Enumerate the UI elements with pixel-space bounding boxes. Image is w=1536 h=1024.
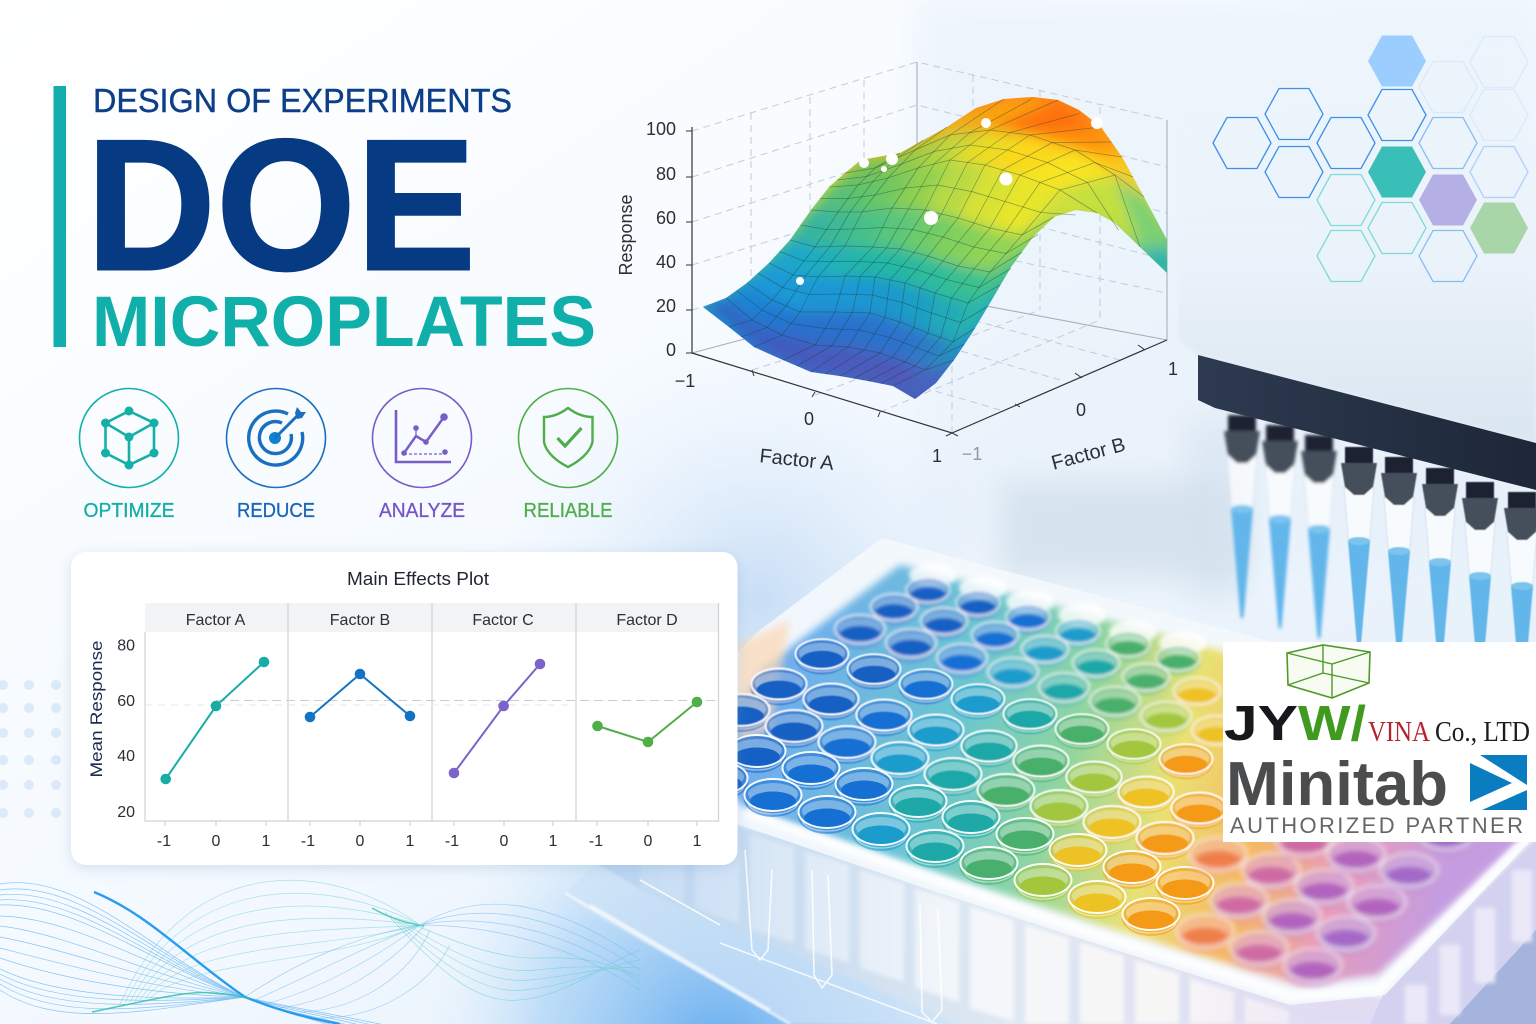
x axis labels: 1 — [262, 833, 271, 850]
factor B axis labels — [962, 359, 1178, 464]
y axis labels: 80 — [117, 638, 135, 654]
plate corner feet — [640, 850, 942, 1024]
panel card — [71, 552, 738, 865]
authorized partner: AUTHORIZED PARTNER — [1230, 813, 1523, 838]
logo panel — [1223, 642, 1536, 842]
factor B axis labels: 0 — [1076, 400, 1086, 420]
microplate — [562, 538, 1536, 1024]
plate side face right — [1370, 835, 1536, 1024]
response axis labels — [646, 119, 676, 360]
response axis labels: 80 — [656, 164, 676, 184]
wells front rows — [690, 735, 1214, 936]
plate tubes — [640, 797, 1289, 1024]
factor A title: Factor A — [758, 445, 835, 475]
hexagon: teal — [1368, 146, 1426, 198]
y axis labels — [117, 638, 135, 821]
factor A axis labels: 1 — [932, 446, 942, 466]
response axis labels: 40 — [656, 252, 676, 272]
icon: JYW cube logo — [1287, 645, 1370, 698]
chart box lines — [686, 62, 1167, 436]
factor A axis labels: 0 — [804, 409, 814, 429]
series: factor C — [449, 659, 545, 778]
wells blurred front right — [1176, 819, 1473, 987]
x axis labels: -1 — [301, 833, 315, 850]
label: reliable: RELIABLE — [524, 500, 612, 522]
label: optimize: OPTIMIZE — [84, 500, 174, 522]
hexagon cluster — [1213, 36, 1528, 282]
VINA Co LTD — [1368, 716, 1530, 748]
y axis labels: 20 — [117, 804, 135, 821]
facet headers: Factor B — [330, 612, 390, 629]
pipette tips — [1224, 415, 1536, 697]
facet headers: Factor D — [616, 612, 678, 629]
plate front face — [600, 790, 1385, 1024]
VINA Co LTD: VINA — [1368, 716, 1430, 748]
wave line ribbon — [0, 880, 640, 1024]
surface base fill — [703, 97, 1167, 399]
hexagon: green — [1470, 202, 1528, 254]
panel title: Main Effects Plot — [347, 569, 489, 589]
response axis labels: 100 — [646, 119, 676, 139]
hexagon outlines: faint — [1419, 36, 1528, 140]
wells middle rows — [712, 639, 1228, 860]
response axis title: Response — [616, 194, 636, 276]
wells far rows — [834, 578, 1243, 749]
machine head: pipette body — [1178, 0, 1536, 443]
x axis labels: -1 — [589, 833, 603, 850]
factor A axis labels: −1 — [675, 371, 695, 391]
title: microplates: MICROPLATES — [92, 283, 596, 362]
facet headers: Factor C — [472, 612, 534, 629]
label: reduce: REDUCE — [237, 500, 315, 522]
hexagon outlines: pale blue — [1419, 118, 1528, 282]
y axis labels: 40 — [117, 748, 135, 765]
Minitab wordmark: Minitab — [1226, 750, 1448, 819]
plate base — [562, 860, 1400, 1024]
x axis labels: 0 — [644, 833, 653, 850]
icon: reduce target — [226, 388, 326, 488]
icon: optimize — [80, 388, 178, 488]
benefit icons row — [80, 388, 618, 522]
x axis labels: 0 — [356, 833, 365, 850]
response axis labels: 0 — [666, 340, 676, 360]
facet headers — [145, 603, 718, 632]
hexagon: purple — [1419, 174, 1477, 226]
panel: main effects plot — [71, 552, 738, 865]
response axis labels: 60 — [656, 208, 676, 228]
facet frame — [145, 603, 718, 826]
plate top surface — [600, 538, 1536, 1005]
title: design of experiments: DESIGN OF EXPERIMENTS — [93, 83, 512, 120]
title: DOE: DOE — [86, 100, 476, 310]
x axis labels: 1 — [549, 833, 558, 850]
JYW wordmark: JY — [1224, 697, 1298, 751]
hexagon: light blue — [1368, 36, 1426, 86]
decorative dot grid — [0, 680, 61, 818]
series: factor B — [305, 669, 415, 722]
icon: analyze chart — [372, 388, 472, 488]
factor B axis labels: −1 — [962, 444, 982, 464]
y axis labels: 60 — [117, 693, 135, 710]
title block — [54, 83, 596, 362]
x axis labels: 1 — [693, 833, 702, 850]
3D response surface chart — [616, 62, 1178, 475]
surface colour cells — [703, 99, 1167, 399]
x axis labels: -1 — [157, 833, 171, 850]
JYW wordmark — [1224, 697, 1366, 751]
design points — [796, 117, 1103, 285]
pipette head dark bar — [1198, 355, 1536, 490]
accent bar — [54, 86, 66, 347]
facet headers: Factor A — [186, 612, 246, 629]
factor A axis labels — [675, 371, 942, 466]
reference dashed lines — [145, 700, 718, 705]
icon: Minitab mark — [1470, 755, 1527, 810]
x axis labels: -1 — [445, 833, 459, 850]
series: factor A — [160, 657, 269, 784]
y axis title: Mean Response — [87, 640, 106, 778]
label: analyze: ANALYZE — [379, 500, 465, 522]
icon: reliable shield — [518, 388, 618, 488]
x axis labels: 0 — [212, 833, 221, 850]
factor B title: Factor B — [1049, 434, 1128, 475]
JYW wordmark: W/ — [1298, 697, 1366, 751]
hexagon outlines: blue — [1213, 88, 1426, 198]
x axis labels: 1 — [406, 833, 415, 850]
series: factor D — [592, 697, 702, 747]
empty back row wells — [909, 563, 1207, 655]
chart walls and grid — [692, 62, 1167, 433]
x axis labels — [157, 833, 702, 850]
response axis labels: 20 — [656, 296, 676, 316]
hexagon outlines: teal — [1317, 174, 1426, 282]
surface mesh lines — [726, 99, 1144, 386]
factor B axis labels: 1 — [1168, 359, 1178, 379]
x axis labels: 0 — [500, 833, 509, 850]
